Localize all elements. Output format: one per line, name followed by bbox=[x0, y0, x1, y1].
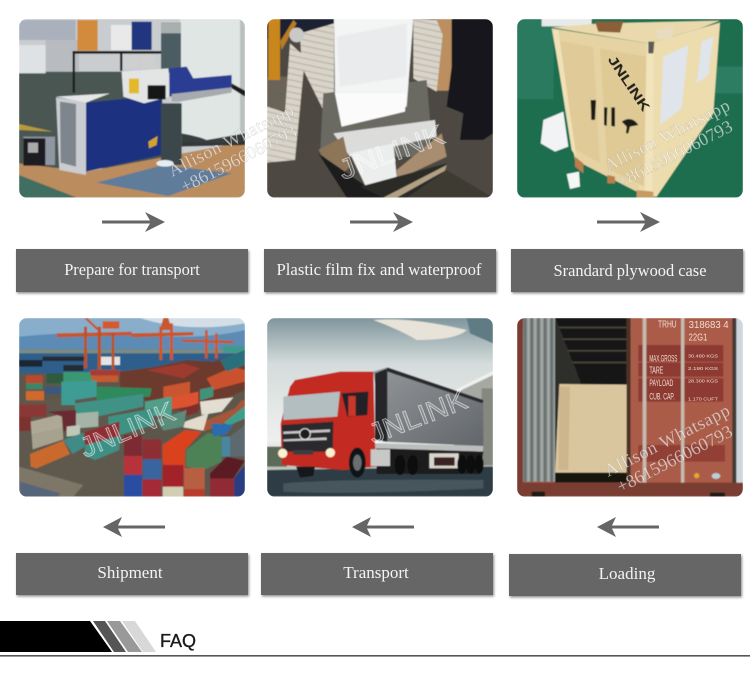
photo: container port bbox=[19, 318, 245, 497]
watermark: Allison Whatsapp, top right: +8615966060793 bbox=[613, 116, 736, 192]
text: container markings bbox=[649, 319, 729, 402]
watermark: JNLINK on truck photo: JNLINK bbox=[364, 384, 472, 450]
button: Loading bbox=[509, 554, 741, 596]
heading: FAQ: FAQ bbox=[160, 631, 196, 651]
arrow: left 2 bbox=[352, 517, 414, 537]
watermark: JNLINK on plastic film photo: JNLINK bbox=[334, 119, 449, 186]
text: container markings: TRHU bbox=[658, 319, 677, 330]
watermark: Allison Whatsapp, bottom right: +8615966060793 bbox=[613, 421, 736, 497]
section header: FAQ banner bbox=[0, 621, 750, 657]
button: Prepare for transport bbox=[16, 249, 248, 292]
button: Plastic film fix and waterproof bbox=[264, 249, 496, 292]
watermark: Allison Whatsapp, bottom right: Allison Whatsapp bbox=[601, 400, 733, 481]
watermark: Allison Whatsapp, top left: +8615966060793 bbox=[177, 121, 300, 197]
button: Prepare for transport: Prepare for transport bbox=[64, 260, 200, 279]
text: container markings: PAYLOAD bbox=[649, 378, 673, 388]
photo: laser marking machine on a table bbox=[19, 19, 245, 198]
text: container markings: 2.190 KGS bbox=[688, 366, 718, 371]
text: container markings: 22G1 bbox=[689, 333, 708, 344]
text: container markings: MAX.GROSS bbox=[649, 353, 677, 363]
arrow: right 2 bbox=[350, 212, 413, 232]
text: container markings: 28.300 KGS bbox=[688, 379, 718, 384]
button: Transport: Transport bbox=[343, 563, 409, 582]
text: container markings: 30.480 KGS bbox=[688, 354, 718, 359]
button: Plastic film fix and waterproof: Plastic film fix and waterproof bbox=[276, 260, 482, 279]
watermark: JNLINK on port photo: JNLINK bbox=[75, 396, 180, 464]
text: container markings: 1.170 CUFT bbox=[688, 397, 718, 402]
button: Shipment bbox=[16, 553, 248, 595]
text: container markings: TARE bbox=[649, 366, 664, 377]
text: container markings: 318683 4 bbox=[689, 320, 729, 331]
button: Shipment: Shipment bbox=[97, 563, 163, 582]
button: Srandard plywood case bbox=[511, 249, 743, 292]
button: Loading: Loading bbox=[599, 564, 656, 583]
photo: plastic film wrapped machine bbox=[267, 19, 493, 198]
button: Transport bbox=[261, 553, 493, 595]
watermark: Allison Whatsapp, top right: Allison Whatsapp bbox=[601, 95, 733, 176]
watermark: Allison Whatsapp, top left: Allison Whatsapp bbox=[165, 100, 297, 181]
photo: crate loaded in a container bbox=[517, 318, 743, 497]
text: container markings: CUB. CAP. bbox=[649, 391, 675, 401]
button: Srandard plywood case: Srandard plywood case bbox=[554, 261, 706, 280]
arrow: left 1 bbox=[103, 517, 165, 537]
arrow: right 3 bbox=[597, 212, 660, 232]
text: JNLINK stencil on crate: JNLINK bbox=[605, 53, 653, 114]
arrow: right 1 bbox=[102, 212, 165, 232]
photo: standard plywood crate bbox=[517, 19, 743, 198]
photo: red truck with grey trailer bbox=[267, 318, 493, 497]
arrow: left 3 bbox=[597, 517, 659, 537]
